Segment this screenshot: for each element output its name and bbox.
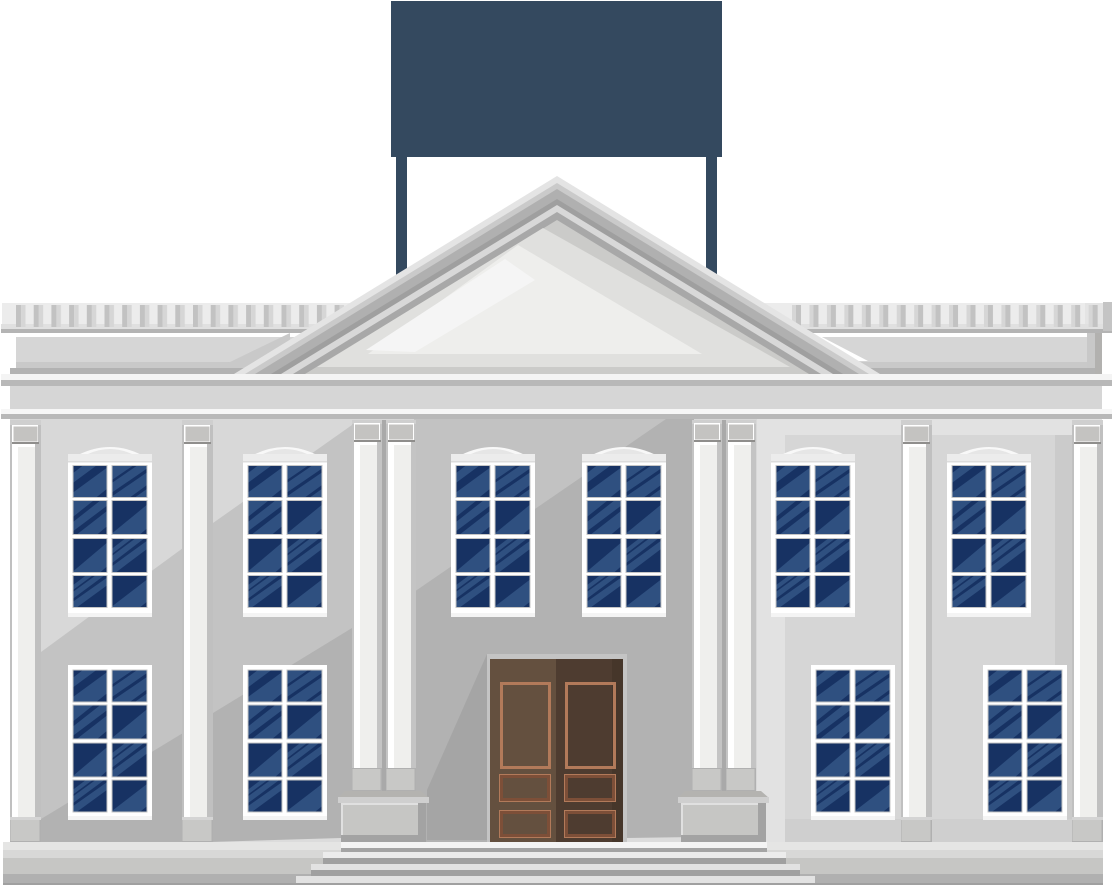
roof balustrade bbox=[1, 302, 1112, 333]
pediment bbox=[234, 176, 880, 374]
columns bbox=[10, 420, 1103, 842]
door bbox=[487, 654, 627, 845]
upper windows bbox=[68, 447, 1031, 617]
cornice bands bbox=[1, 374, 1112, 419]
column pedestals bbox=[338, 791, 769, 842]
frieze behind pediment bbox=[10, 333, 1102, 374]
ground plinth bbox=[3, 842, 1103, 885]
entrance steps bbox=[296, 842, 815, 885]
lower windows bbox=[68, 665, 1067, 820]
facade wall bbox=[10, 419, 1102, 843]
sign board bbox=[391, 1, 722, 275]
